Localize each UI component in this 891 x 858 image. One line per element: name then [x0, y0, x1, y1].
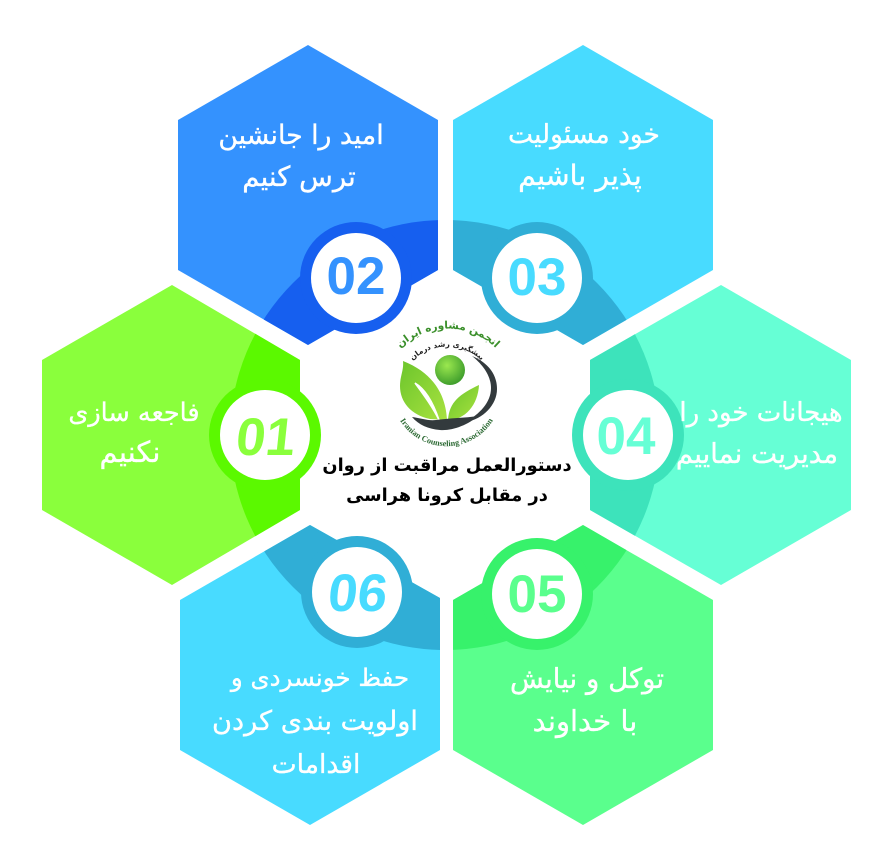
- logo English name: Iranian Counseling Association: [400, 418, 493, 447]
- badge 04: 04: [597, 407, 656, 466]
- logo arc: [466, 356, 497, 422]
- badge 03: 03: [508, 248, 566, 307]
- text: 04: هیجانات خود را: [679, 398, 843, 428]
- text: 05: با خداوند: [533, 704, 637, 738]
- badge 04: [572, 379, 684, 491]
- panel: 05 prayer: [453, 525, 713, 825]
- text: 06: [212, 663, 418, 780]
- badge 01: [209, 379, 321, 491]
- badge 01: 01: [233, 408, 298, 467]
- badge 06: [301, 536, 413, 648]
- text: 04: [676, 398, 843, 470]
- badge 02: [300, 222, 412, 334]
- logo: Iranian Counseling Association: [399, 320, 500, 447]
- text: 06: حفظ خونسردی و: [229, 663, 409, 692]
- badge 03: [481, 222, 593, 334]
- text: 02: ترس کنیم: [242, 160, 356, 193]
- center heading: دستورالعمل مراقبت از روان: [322, 455, 572, 476]
- logo left leaf: [400, 361, 447, 420]
- text: 05: توکل و نیایش: [510, 662, 664, 695]
- logo hand: [412, 416, 478, 430]
- text: 01: [68, 398, 200, 470]
- text: 05: [510, 662, 664, 738]
- text: 01: فاجعه سازی: [68, 398, 200, 428]
- text: 01: نکنیم: [100, 435, 160, 470]
- text: 02: امید را جانشین: [218, 120, 384, 151]
- panel: 06 composure: [180, 525, 440, 825]
- text: 04: مدیریت نماییم: [676, 437, 838, 470]
- text: 06: اولویت بندی کردن: [212, 706, 418, 737]
- badge 05: 05: [508, 565, 566, 624]
- center heading: [322, 455, 572, 506]
- text: 06: اقدامات: [272, 749, 360, 780]
- logo tagline: پیشگیری رشد درمان: [412, 342, 482, 361]
- logo right leaf: [448, 385, 479, 420]
- logo Persian name: انجمن مشاوره ایران: [399, 320, 500, 348]
- badge 02: 02: [327, 247, 385, 306]
- text: 02: [218, 120, 384, 193]
- badge 06: 06: [325, 564, 390, 623]
- badge 05: [481, 538, 593, 650]
- panel: 03 responsibility: [453, 45, 713, 345]
- text: 03: [508, 119, 660, 192]
- text: 03: خود مسئولیت: [508, 119, 660, 150]
- panel: 01 catastrophizing: [42, 285, 321, 585]
- center heading: در مقابل کرونا هراسی: [346, 485, 548, 506]
- text: 03: پذیر باشیم: [518, 159, 642, 192]
- logo sun: [435, 355, 465, 385]
- panel: 04 emotions: [572, 285, 851, 585]
- panel: 02 hope: [178, 45, 438, 345]
